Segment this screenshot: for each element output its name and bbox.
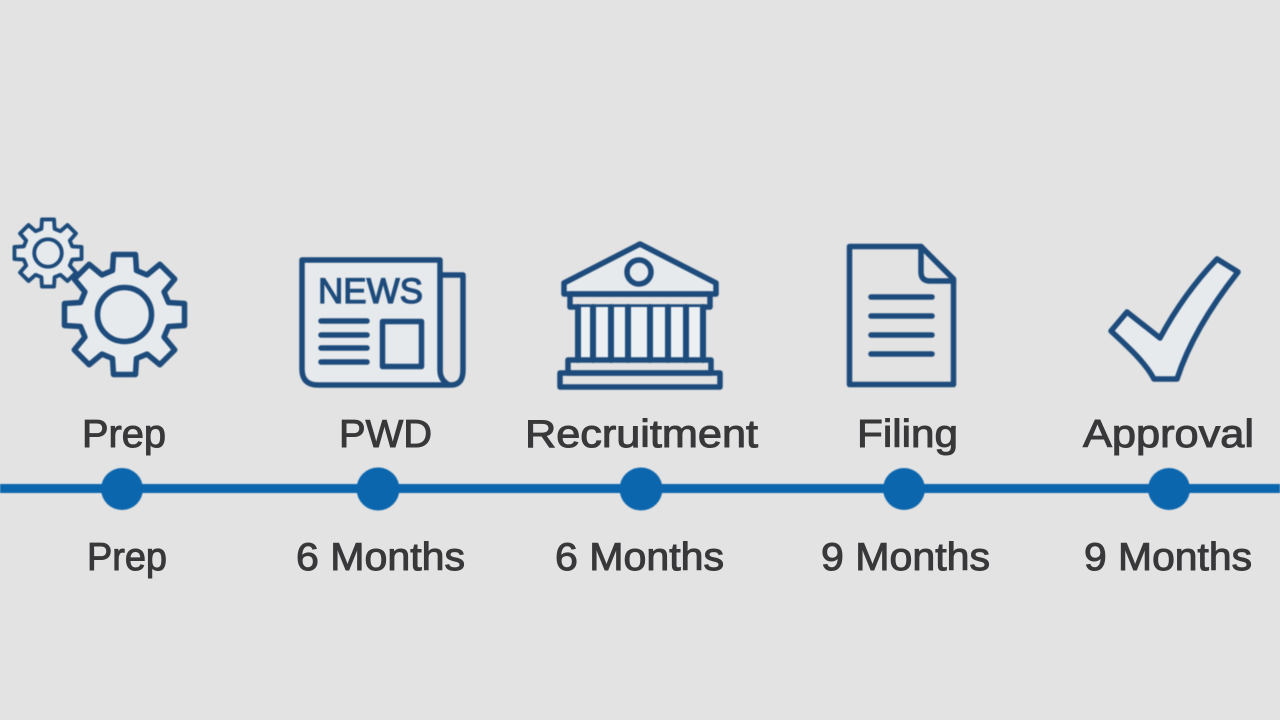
stage label: Approval: Approval: [1083, 413, 1254, 456]
timeline dot: Recruitment: [620, 468, 662, 510]
stage label: Filing: Filing: [857, 413, 958, 456]
stage label: Recruitment: Recruitment: [525, 413, 758, 456]
icon: gears: [14, 219, 185, 374]
icon: bank building: [560, 244, 720, 387]
timeline dot: Filing: [883, 468, 925, 510]
duration label: Filing 9 Months: 9 Months: [821, 536, 990, 579]
timeline dot: Approval: [1148, 468, 1190, 510]
duration label: Approval 9 Months: 9 Months: [1084, 536, 1252, 579]
timeline: [0, 468, 1280, 510]
icon: newspaper: [302, 260, 463, 385]
stage label: PWD: PWD: [339, 413, 432, 456]
duration label: Prep: Prep: [87, 536, 167, 579]
duration label: PWD 6 Months: 6 Months: [296, 536, 465, 579]
duration label: Recruitment 6 Months: 6 Months: [555, 536, 724, 579]
timeline line: [0, 484, 1280, 493]
stage label: Prep: Prep: [82, 413, 166, 456]
large gear: [64, 254, 184, 374]
timeline dot: Prep: [101, 468, 143, 510]
icon: document: [850, 246, 954, 384]
timeline dot: PWD: [356, 468, 400, 510]
newspaper headline: NEWS: [318, 272, 423, 311]
icon: check mark: [1111, 259, 1238, 379]
small gear: [14, 219, 82, 287]
